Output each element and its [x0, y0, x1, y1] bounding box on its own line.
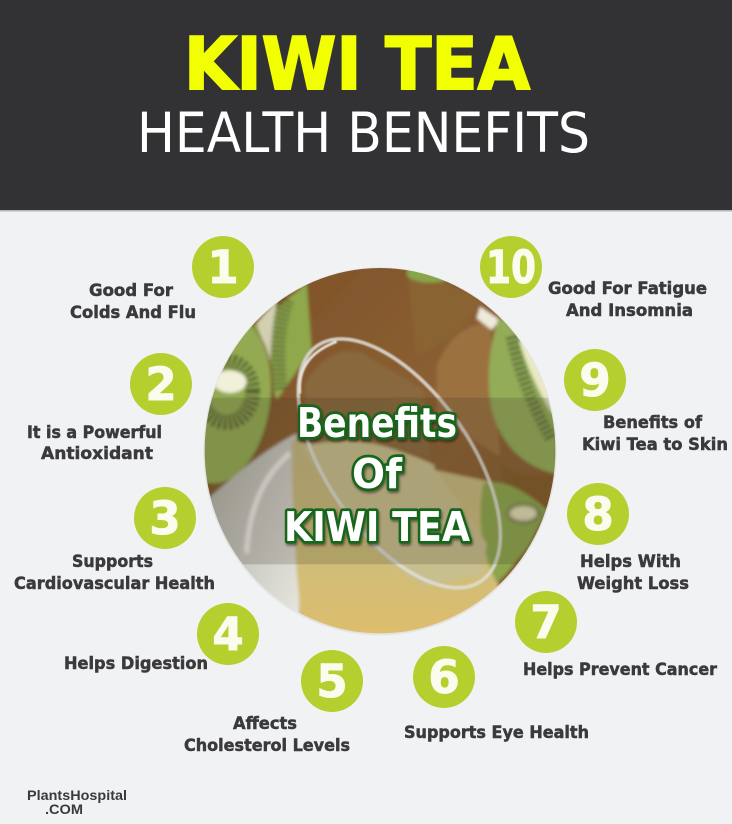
- item 1 badge: 1: [207, 241, 239, 294]
- item 4 badge: [197, 603, 259, 665]
- item 6 badge: [413, 646, 475, 708]
- item 5 badge: 5: [316, 655, 348, 708]
- item 2 label: [27, 423, 162, 463]
- item 2 badge: 2: [145, 358, 177, 411]
- item 10 label: And Insomnia: [566, 301, 693, 320]
- item 8 badge: [567, 483, 629, 545]
- central title: Of: [352, 450, 403, 498]
- item 8 label: Weight Loss: [577, 574, 689, 593]
- item 9 badge: 9: [579, 354, 611, 407]
- back left kiwi slice: [253, 283, 312, 400]
- item 4 label: Helps Digestion: [64, 654, 208, 673]
- subtitle: HEALTH BENEFITS: HEALTH BENEFITS: [137, 101, 590, 165]
- item 9 label: Kiwi Tea to Skin: [582, 435, 728, 454]
- item 2 label: Antioxidant: [41, 444, 153, 463]
- brown kiwi skins: [410, 282, 426, 298]
- dark title band: [190, 398, 570, 564]
- item 8 label: Helps With: [580, 552, 681, 571]
- item 5 label: Cholesterol Levels: [184, 736, 350, 755]
- central title: Benefits: [297, 399, 457, 447]
- item 3 badge: [134, 487, 196, 549]
- right kiwi slice: [489, 318, 557, 474]
- item 9 label: [582, 413, 728, 454]
- glass interior: [302, 441, 487, 587]
- item 3 label: Supports: [72, 552, 153, 571]
- site credit: PlantsHospital: [27, 787, 127, 803]
- glass rim: [296, 336, 503, 590]
- item 10 label: [548, 279, 707, 320]
- item 5 label: [184, 714, 350, 755]
- item 8 badge: 8: [582, 488, 614, 541]
- item 3 badge: 3: [149, 492, 181, 545]
- small kiwi slice: [480, 482, 547, 583]
- title: KIWI TEA: KIWI TEA: [184, 22, 530, 106]
- item 7 badge: 7: [530, 596, 562, 649]
- item 1 label: Good For: [89, 281, 174, 300]
- item 2 badge: [130, 353, 192, 415]
- item 4 badge: 4: [212, 608, 244, 661]
- item 5 badge: [301, 650, 363, 712]
- item 6 label: Supports Eye Health: [404, 723, 589, 742]
- item 3 label: Cardiovascular Health: [14, 574, 215, 593]
- item 1 label: Colds And Flu: [70, 303, 196, 322]
- item 8 label: [577, 552, 689, 593]
- item 3 label: [14, 552, 215, 593]
- front left kiwi slice: [254, 328, 274, 387]
- item 1 badge: [192, 236, 254, 298]
- central title: [284, 399, 470, 551]
- item 6 badge: 6: [428, 651, 460, 704]
- lower glass and tea: [210, 432, 302, 614]
- central title: KIWI TEA: [284, 503, 470, 551]
- item 2 label: It is a Powerful: [27, 423, 162, 442]
- site credit: .COM: [45, 801, 83, 817]
- item 10 badge: 10: [486, 241, 536, 294]
- item 1 label: [70, 281, 196, 322]
- item 10 label: Good For Fatigue: [548, 279, 707, 298]
- item 9 label: Benefits of: [603, 413, 703, 432]
- item 9 badge: [564, 349, 626, 411]
- site credit: [27, 787, 127, 817]
- header band: [0, 0, 732, 212]
- central photo: kiwi fruit and glass of tea: [204, 268, 556, 636]
- item 7 badge: [515, 591, 577, 653]
- item 7 label: Helps Prevent Cancer: [523, 660, 718, 679]
- item 5 label: Affects: [233, 714, 297, 733]
